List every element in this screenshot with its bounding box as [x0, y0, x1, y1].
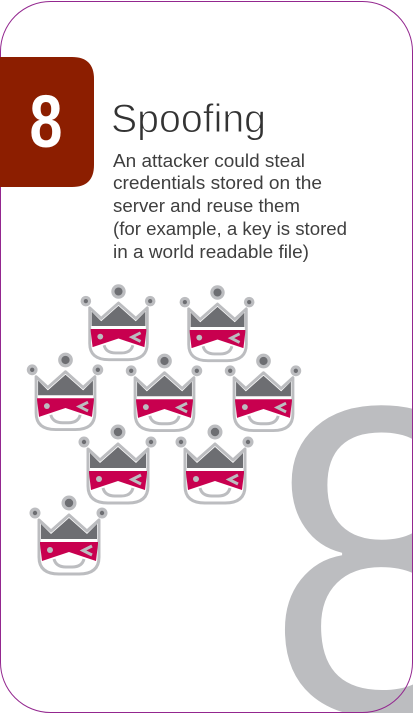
icon: crown mask 8 [30, 496, 108, 574]
icons: crowned spoofing masks [27, 284, 301, 574]
icon: crown mask 7 [176, 424, 254, 503]
icon: crown mask 6 [78, 424, 156, 503]
icon: crown mask 1 [81, 284, 155, 360]
number badge [0, 57, 94, 187]
description text: credentials stored on the [113, 173, 322, 193]
description text: An attacker could steal [113, 151, 305, 171]
description text [113, 151, 347, 262]
icon: crown mask 5 [225, 354, 301, 431]
title: Spoofing [111, 97, 266, 141]
number badge: 8 [30, 81, 62, 164]
icon: crown mask 2 [180, 285, 254, 361]
icon: crown mask 4 [126, 354, 202, 431]
description text: server and reuse them [113, 196, 300, 216]
icon: crown mask 3 [27, 353, 103, 430]
description text: (for example, a key is stored [113, 219, 347, 239]
description text: in a world readable file) [113, 242, 309, 262]
